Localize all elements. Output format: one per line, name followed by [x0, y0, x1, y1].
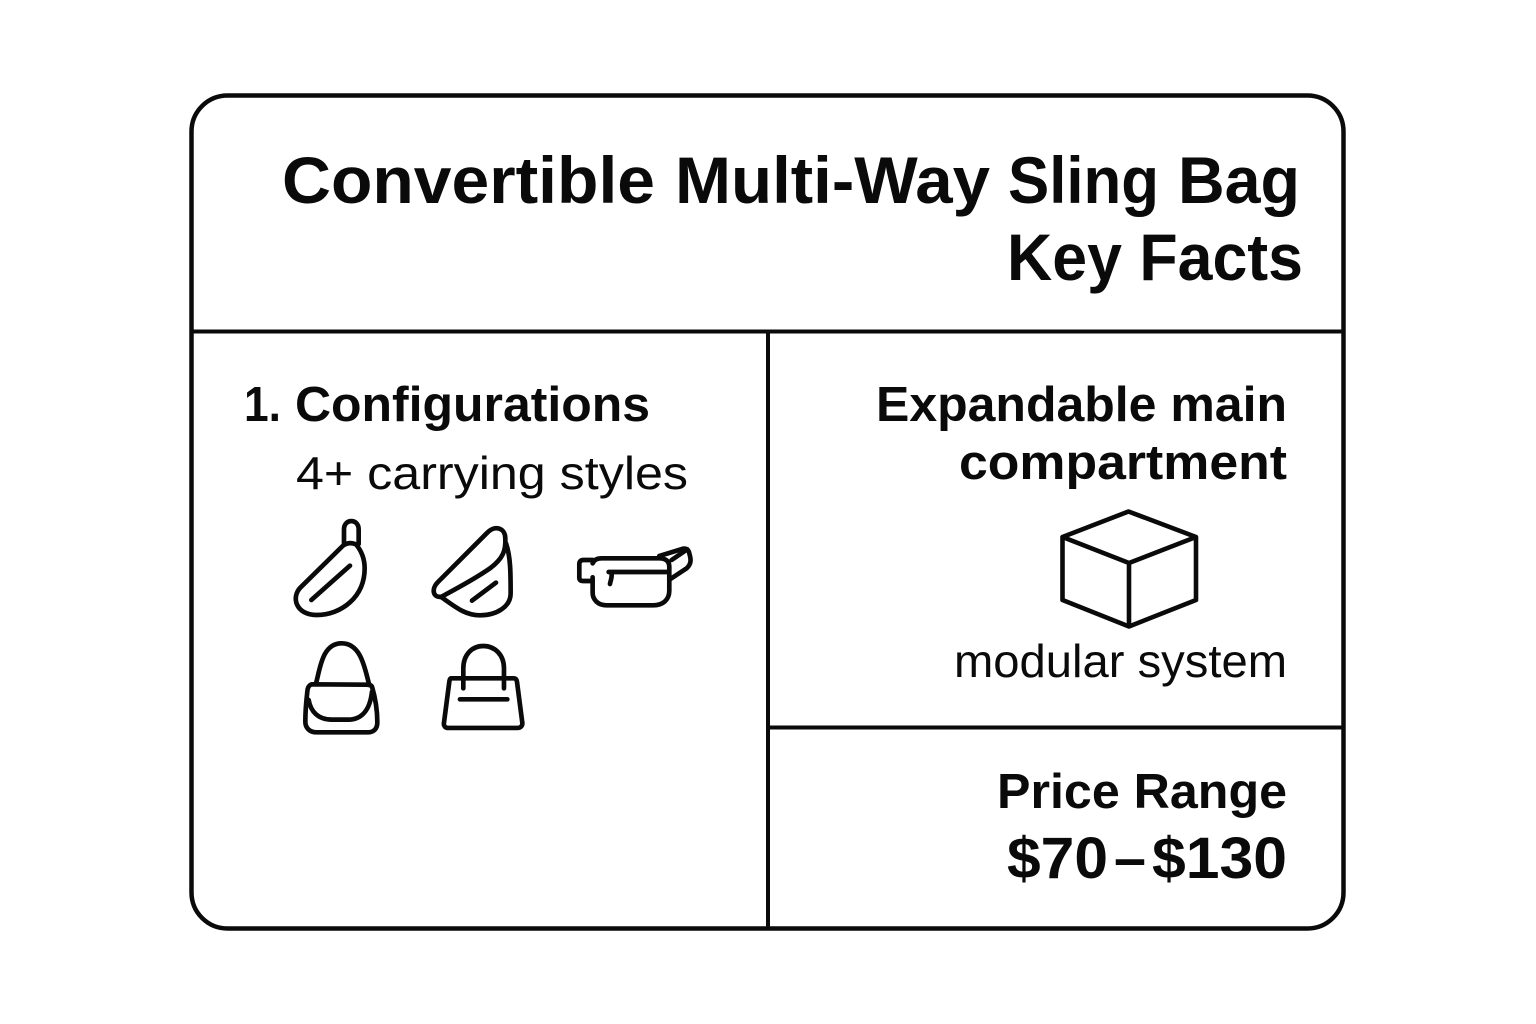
icon: sling bag angled: [434, 528, 511, 615]
icon: cube: [1062, 512, 1196, 626]
icon: belt bag: [579, 549, 691, 605]
heading: configurations: Configurations: [295, 378, 650, 432]
title: Key Facts: [1007, 220, 1303, 294]
title: Convertible: [282, 143, 655, 217]
price value: $70: [1007, 826, 1108, 891]
heading: configurations: 1.: [244, 378, 281, 432]
icon: sling bag upright: [296, 521, 365, 615]
heading: expandable main compartment: [876, 378, 1287, 490]
text: carrying styles: 4+ carrying styles: [296, 447, 688, 499]
panel: price range: [997, 765, 1287, 891]
price value: [1007, 826, 1287, 891]
icon: handbag: [444, 646, 522, 728]
price value: $130: [1152, 826, 1287, 891]
text: modular system: modular system: [954, 635, 1287, 687]
title: Sling: [1008, 143, 1159, 217]
panel: expandable main compartment: [876, 378, 1287, 687]
panel: configurations: [244, 378, 691, 732]
heading: expandable main compartment: Expandable main: [876, 378, 1287, 432]
heading: price range: Price Range: [997, 765, 1287, 819]
heading: expandable main compartment: compartment: [959, 436, 1287, 490]
title: Multi-Way: [675, 143, 990, 217]
price value: –: [1114, 826, 1146, 891]
title: Bag: [1178, 143, 1300, 217]
icon: flap shoulder bag: [305, 643, 377, 732]
icons: bag styles: [296, 521, 691, 732]
title: [282, 143, 1303, 294]
outer card frame: [192, 96, 1344, 928]
